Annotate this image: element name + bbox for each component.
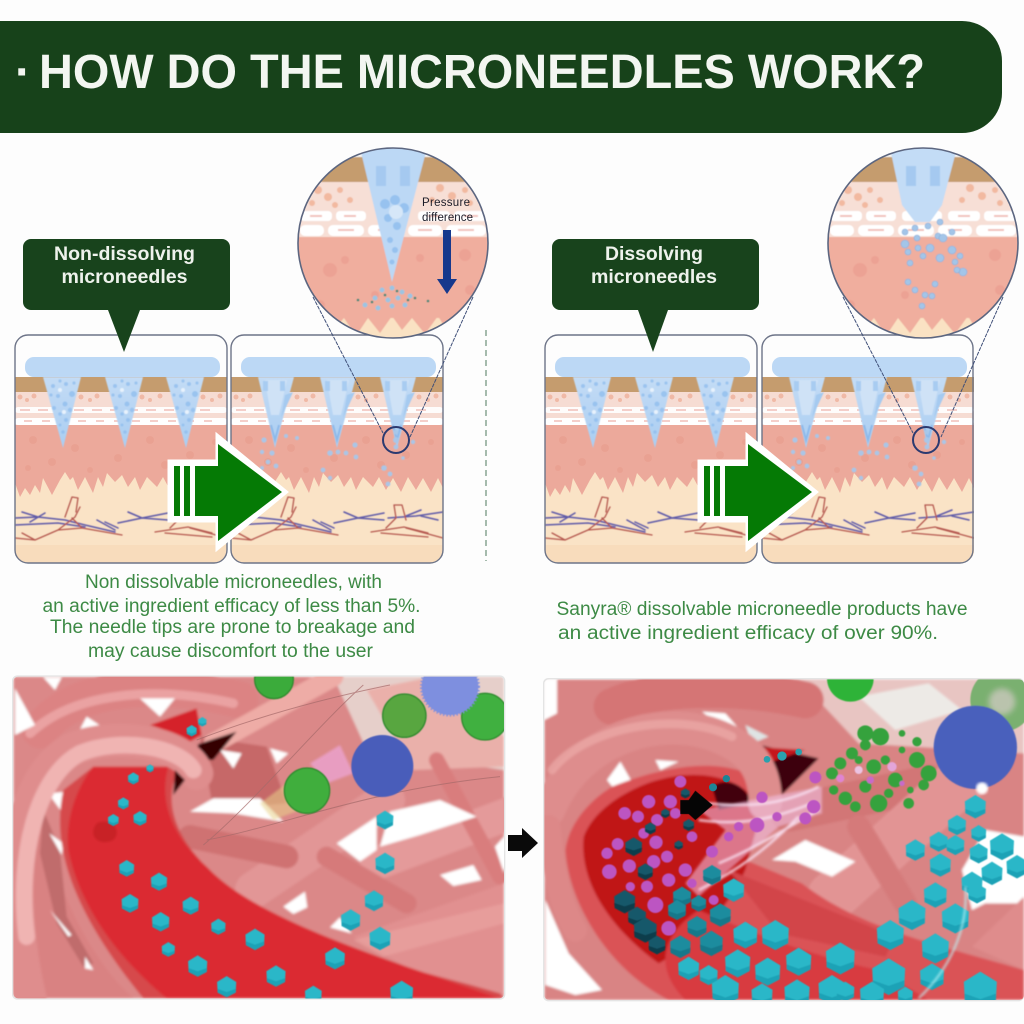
black arrow inside vessel [680, 791, 713, 820]
arrow: before to after [508, 828, 538, 858]
drug particles: green cluster [826, 725, 937, 812]
callout: dissolving microneedles: microneedles [591, 267, 717, 288]
magnifier: needle tip with pressure difference: difference [422, 212, 473, 224]
callout: non-dissolving microneedles [23, 239, 230, 352]
magnifier: needle tip with pressure difference [298, 148, 488, 340]
caption: Sanyra dissolvable microneedles: Sanyra® dissolvable microneedle products have [556, 599, 968, 620]
skin cross-section after [231, 335, 443, 563]
magnifier connector lines [313, 297, 473, 437]
caption: non-dissolvable microneedles: an active ingredient efficacy of less than 5%. [42, 596, 420, 617]
arrow: progression [700, 437, 815, 547]
wisps: released ingredients [685, 787, 822, 897]
magnifier: dissolved needle releasing particles [828, 148, 1018, 340]
panel: non-dissolving microneedles diagram [15, 148, 488, 563]
title bullet: · [15, 46, 31, 99]
drug particles: purple [601, 771, 821, 936]
divider line [485, 330, 487, 561]
illustration: blood vessel before [12, 658, 510, 1006]
drug particles: green beads [253, 676, 504, 815]
caption: non-dissolvable microneedles [42, 572, 420, 662]
skin cross-section after [762, 335, 974, 563]
title banner [0, 21, 1002, 133]
drug particles: blue and green beads [826, 679, 1024, 796]
arrow: progression [170, 437, 285, 547]
caption: Sanyra dissolvable microneedles: an active ingredient efficacy of over 90%. [558, 623, 938, 644]
caption: non-dissolvable microneedles: The needle tips are prone to breakage and [50, 617, 415, 638]
magnified target circle [383, 427, 409, 453]
illustration: blood vessel after [543, 655, 1024, 1008]
callout: non-dissolving microneedles: microneedles [62, 267, 188, 288]
drug particles: blue beads [350, 676, 480, 798]
caption: non-dissolvable microneedles: Non dissolvable microneedles, with [85, 572, 382, 593]
drug particles: mid teal [668, 865, 731, 958]
drug particles: cyan [108, 717, 413, 1006]
panel: dissolving microneedles diagram [545, 148, 1018, 563]
title text: HOW DO THE MICRONEEDLES WORK? [39, 46, 925, 99]
magnified target circle [913, 427, 939, 453]
skin cross-section before [15, 335, 227, 563]
caption: non-dissolvable microneedles: may cause discomfort to the user [88, 641, 374, 662]
drug particles: cyan [678, 795, 1024, 1008]
callout: non-dissolving microneedles: Non-dissolving [54, 244, 195, 265]
callout: dissolving microneedles: Dissolving [605, 244, 703, 265]
skin cross-section before [545, 335, 757, 563]
arrow: downward pressure [437, 230, 457, 294]
callout: dissolving microneedles [552, 239, 759, 352]
drug particles: dark teal [614, 788, 694, 954]
caption: Sanyra dissolvable microneedles [556, 599, 968, 644]
label: pressure difference: Pressure [422, 197, 470, 209]
magnifier connector lines [843, 297, 1003, 437]
